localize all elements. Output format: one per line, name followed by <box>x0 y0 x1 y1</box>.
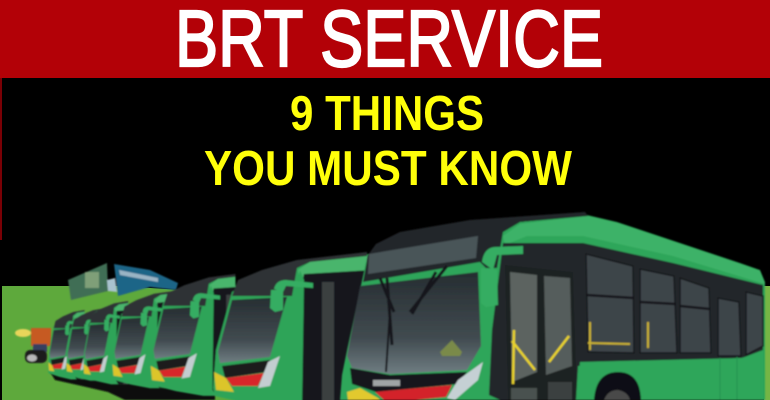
large front bus <box>340 212 765 400</box>
mirror arm <box>482 246 523 270</box>
red title banner <box>0 0 770 83</box>
door yellow rails <box>512 330 569 384</box>
yellow badge <box>347 388 380 400</box>
red stripe <box>375 385 452 400</box>
wheel arch <box>594 372 641 400</box>
right edge green strip <box>764 286 770 400</box>
green ground <box>2 286 340 400</box>
left edge line <box>0 78 2 240</box>
subtitle: 9 things you must know: 9 THINGS <box>290 87 484 141</box>
bus fleet: rear buses <box>48 252 372 400</box>
window dividers <box>586 295 710 309</box>
ground shadows <box>50 372 215 400</box>
brand badge <box>373 380 400 386</box>
small vehicle <box>15 328 51 363</box>
dashboard yellow detail <box>440 340 462 356</box>
bus 3 <box>150 274 237 397</box>
subtitle: 9 things you must know <box>204 87 573 196</box>
bus 6 <box>66 308 102 382</box>
wipers <box>380 266 447 372</box>
billboards <box>68 263 178 300</box>
bus body <box>340 215 765 400</box>
door glass <box>510 272 537 382</box>
passenger windows <box>586 254 763 356</box>
destination display <box>368 236 478 274</box>
headlight <box>447 362 483 400</box>
wheel <box>604 390 630 400</box>
front grille <box>350 368 467 392</box>
bus 5 <box>82 300 129 386</box>
window yellow rails <box>588 322 648 350</box>
bus 7 <box>48 309 86 380</box>
subtitle: 9 things you must know: YOU MUST KNOW <box>204 142 573 196</box>
windscreen <box>347 272 481 374</box>
rear panel lines <box>720 357 737 400</box>
bus 2 <box>213 252 372 400</box>
roof top green <box>503 216 765 284</box>
door <box>505 265 577 400</box>
lower body panel <box>576 353 765 400</box>
bus 4 <box>111 290 172 390</box>
mirror <box>481 268 498 307</box>
dark roof cap <box>363 212 588 282</box>
side window band <box>489 243 763 400</box>
